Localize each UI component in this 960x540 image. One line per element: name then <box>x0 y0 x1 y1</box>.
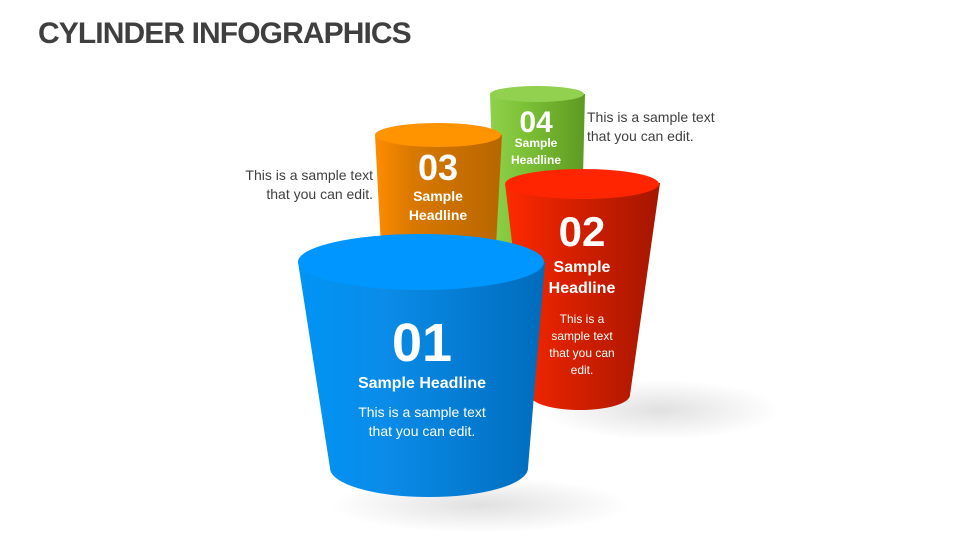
cylinder 02 red: 02 <box>559 208 605 255</box>
cylinder 02 red: Sample <box>554 259 611 276</box>
cylinder 03 orange: 03 <box>418 147 458 188</box>
cylinder 03 orange <box>375 123 502 320</box>
cylinder 03 orange: Headline <box>409 207 467 223</box>
cylinder 01 blue: Sample Headline <box>358 375 486 392</box>
cylinder 02 red: Headline <box>549 280 615 297</box>
cylinder 04 green: 04 <box>519 106 553 139</box>
cylinder 01 blue: 01 <box>392 313 452 373</box>
title: CYLINDER INFOGRAPHICS <box>38 17 411 50</box>
cylinder 02 red: This is a <box>560 312 605 326</box>
side text 04: This is a sample text that you can edit. <box>587 109 715 144</box>
cylinder 03 orange: Sample <box>413 188 463 204</box>
cylinder 04 green <box>490 86 585 300</box>
cylinder 01 blue <box>298 234 545 497</box>
shadows <box>330 380 780 533</box>
cylinder 02 red: sample text <box>551 329 613 343</box>
cylinder 04 green: Headline <box>511 153 561 167</box>
cylinder 02 red <box>505 169 660 410</box>
cylinder 02 red: that you can <box>549 346 615 360</box>
side text 03: This is a sample text that you can edit. <box>245 167 373 202</box>
cylinder 01 blue: This is a sample text <box>358 404 486 420</box>
cylinder 01 blue: that you can edit. <box>369 423 475 439</box>
cylinder 02 red: edit. <box>571 363 593 377</box>
cylinder 04 green: Sample <box>515 136 558 150</box>
